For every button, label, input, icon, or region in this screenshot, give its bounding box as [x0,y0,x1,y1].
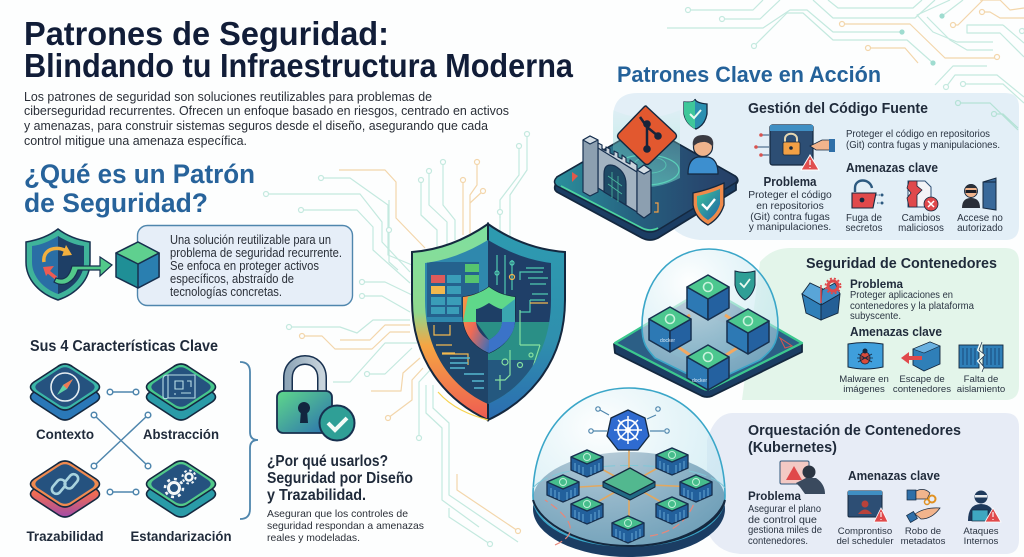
tile: Trazabilidad [26,461,104,544]
illustration: git fortress [554,99,738,240]
top right traces [688,0,763,10]
heading: what is a pattern [24,159,255,218]
panel: container security: Proteger aplicaciones en [850,290,953,301]
why use them: seguridad respondan a amenazas [267,520,424,532]
tile: Estandarización: Estandarización [130,528,232,544]
panel: container security: Amenazas clave [850,325,942,339]
icon: open box with gear [802,278,840,320]
panel: container orchestration: metadatos [901,536,946,547]
intro text: ciberseguridad recurrentes. Ofrecen un enfoque basado en riesgos, centrado en activos [24,103,509,118]
bracket [240,362,258,519]
panel: container orchestration: Orquestación de Contenedores [748,423,961,439]
icon: leaking secrets [852,180,884,208]
git logo diamond [618,106,676,164]
tile: Abstracción: Abstracción [143,426,219,442]
title [24,15,574,84]
panel: container orchestration: Ataques [963,526,999,537]
tile: Contexto: Contexto [36,426,94,442]
callout: definition: tecnologías concretas. [170,285,282,299]
tile: Contexto [30,364,100,442]
why use them: Aseguran que los controles de [267,508,408,520]
icon: lack of isolation [959,342,1003,372]
icon: metadata theft [907,489,940,522]
panel: source code management: en repositorios [756,201,824,212]
illustration: container dome: docker [660,338,675,344]
kubernetes logo [607,410,649,450]
connectors between tiles [91,389,151,495]
icon: browser with lock and hand [754,125,835,170]
panel: container security: contenedores [893,384,951,395]
panel: container security: imágenes [843,384,885,395]
panel: source code management [554,93,1019,240]
panel: source code management: secretos [845,223,883,234]
heading: key patterns: Patrones Clave en Acción [617,62,881,87]
panel: container orchestration [533,388,1019,557]
why use them [267,453,424,544]
shield on dome [735,271,755,300]
panel: container orchestration: (Kubernetes) [748,440,837,456]
icon: unauthorized access [962,178,996,210]
panel: container security: contenedores y la plataforma [850,301,974,312]
callout: definition [138,226,352,306]
intro text: y amenazas, para construir sistemas seguros desde el diseño, asegurando que cada [24,118,489,133]
central shield [412,224,565,420]
panel: container security: subyscente. [850,311,901,322]
why use them: y Trazabilidad. [267,487,366,504]
circuit traces background [264,0,1024,546]
panel: container orchestration: de control que [748,515,817,526]
panel: source code management: Proteger el código en repositorios [846,129,990,140]
panel: container security [614,248,1019,400]
icon: malicious changes [907,181,938,211]
panel: source code management: Proteger el código [748,190,832,201]
small shield [684,99,707,129]
panel: source code management: Problema [764,175,817,189]
panel: container orchestration: contenedores. [748,536,808,547]
panel: source code management: Accese no [957,213,1003,224]
intro text: control mitigue una amenaza específica. [24,133,247,148]
why use them: reales y modeladas. [267,532,360,544]
title: Patrones de Seguridad: [24,15,389,52]
panel: container orchestration: Asegurar el plano [748,504,821,515]
why use them: ¿Por qué usarlos? [267,453,388,470]
heading: what is a pattern: de Seguridad? [24,188,208,218]
intro text [24,89,509,148]
panel: container security: Problema [850,277,903,291]
panel: source code management: y manipulaciones. [749,222,831,233]
panel: source code management: Cambios [902,213,940,224]
icon: shield with cycle arrows and box [26,229,159,300]
panel: source code management: Gestión del Código Fuente [748,100,928,117]
callout: definition: específicos, abstraído de [170,272,294,286]
illustration: container dome: docker [692,378,707,384]
panel: source code management: Fuga de [846,213,883,224]
heading: what is a pattern: ¿Qué es un Patrón [24,159,255,189]
illustration: kubernetes dome [533,388,725,557]
panel: container orchestration: Internos [964,536,999,547]
icon: hacker at control plane [780,461,825,494]
panel: container security: aislamiento [957,384,1005,395]
icon: container escape [901,342,940,371]
icon: malware in images [848,342,883,369]
panel: source code management: maliciosos [898,223,944,234]
panel: container orchestration: del scheduler [836,536,894,547]
panel: container orchestration: Comprontiso [838,526,892,537]
illustration: container dome [614,249,802,397]
panel: container orchestration: Problema [748,489,801,503]
tile: Abstracción [143,364,219,442]
tile: Estandarización [130,461,232,544]
panel: container security: Escape de [899,374,945,385]
panel: source code management: Amenazas clave [846,160,938,175]
panel: container security: Falta de [964,374,998,385]
mini shield emblem [463,287,515,353]
panel: container security: Seguridad de Contenedores [806,256,997,272]
intro text: Los patrones de seguridad son soluciones reutilizables para problemas de [24,89,432,104]
panel: container orchestration: gestiona miles de [748,525,822,536]
panel: container orchestration: Amenazas clave [848,469,940,483]
callout: definition: Una solución reutilizable para un [170,233,331,247]
panel: container security: Malware en [839,374,889,385]
panel: container orchestration: Robo de [905,526,941,537]
icon: scheduler compromise [848,491,888,522]
panel: source code management: (Git) contra fugas [750,212,830,223]
fortress wall [583,136,651,218]
callout: definition: Se enfoca en proteger activos [170,259,319,273]
why use them: Seguridad por Diseño [267,470,413,487]
heading: 4 key characteristics: Sus 4 Características Clave [30,338,218,355]
icon: padlock with check [277,360,354,440]
large shield [693,183,724,225]
panel: source code management: (Git) contra fugas y manipulaciones. [846,140,1000,151]
title: Blindando tu Infraestructura Moderna [24,47,574,84]
tile: Trazabilidad: Trazabilidad [26,528,104,544]
callout: definition: problema de seguridad recurrente. [170,246,342,260]
person [688,135,718,174]
panel: source code management: autorizado [957,223,1003,234]
icon: insider attacks [968,490,1001,522]
